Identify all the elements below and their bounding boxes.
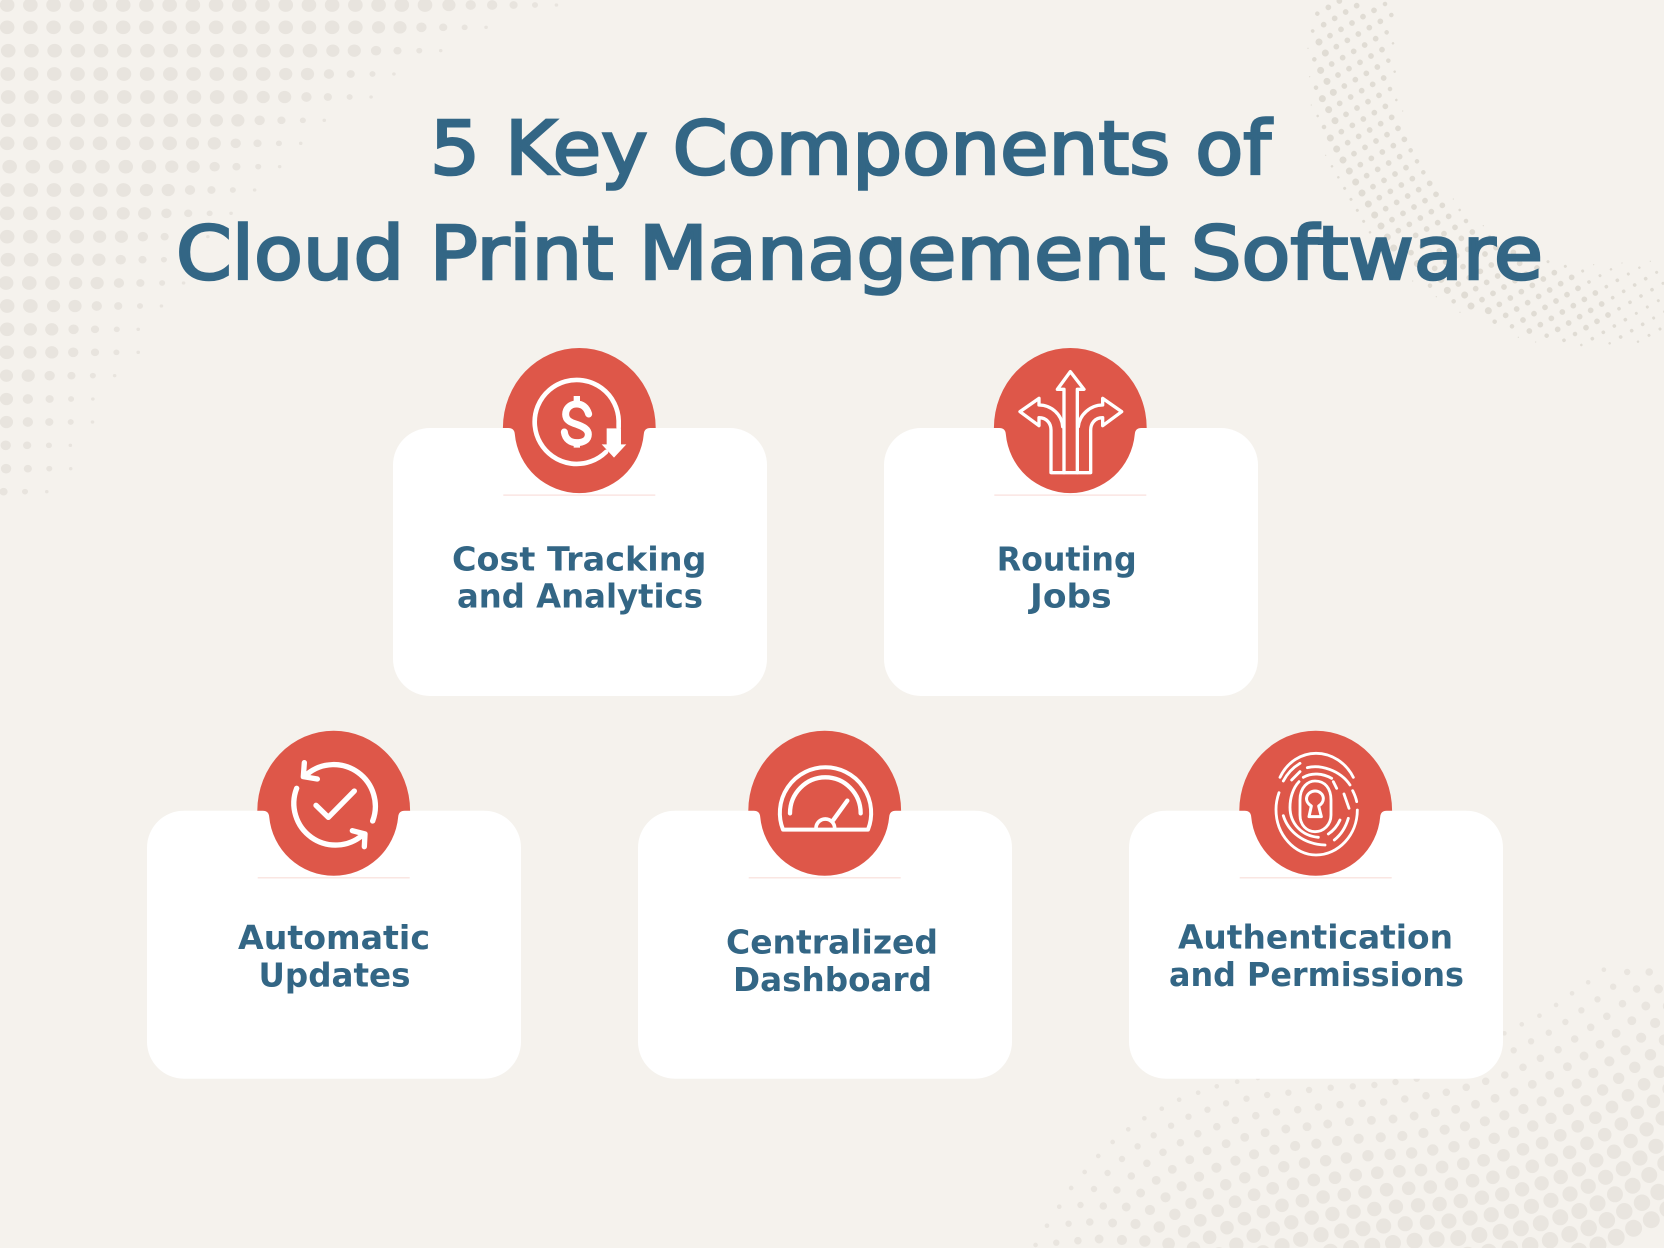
label: Updates xyxy=(258,955,410,994)
icon: three way arrows xyxy=(1020,372,1122,473)
label xyxy=(1169,918,1464,994)
badge: routing xyxy=(994,348,1147,496)
title: Cloud Print Management Software xyxy=(176,211,1543,297)
label: Routing xyxy=(997,540,1137,579)
icon: refresh with check xyxy=(294,763,375,847)
panel: Automatic Updates xyxy=(147,731,521,1079)
panel: Routing Jobs xyxy=(884,348,1258,696)
label: Authentication xyxy=(1178,918,1453,956)
halftone: top right band xyxy=(1262,0,1664,441)
halftone: bottom right xyxy=(1000,960,1664,1248)
label xyxy=(997,540,1137,615)
panel: Cost Tracking and Analytics xyxy=(393,348,767,696)
label: Dashboard xyxy=(733,960,932,999)
panel: Authentication and Permissions xyxy=(1129,731,1503,1079)
label xyxy=(452,540,706,615)
label xyxy=(238,918,430,994)
title xyxy=(176,106,1543,297)
badge: cost tracking xyxy=(503,348,656,496)
label: Cost Tracking xyxy=(452,540,706,579)
title: 5 Key Components of xyxy=(430,106,1273,192)
label: Centralized xyxy=(726,922,938,962)
panel: Centralized Dashboard xyxy=(638,731,1012,1079)
icon: gauge xyxy=(780,767,871,830)
halftone: top left xyxy=(4,5,556,492)
badge: dashboard xyxy=(748,731,901,878)
label: Jobs xyxy=(1028,576,1112,615)
label: Automatic xyxy=(238,918,430,957)
badge: authentication xyxy=(1239,731,1392,878)
badge: updates xyxy=(257,731,410,878)
label: and Analytics xyxy=(457,576,703,615)
label xyxy=(726,922,938,999)
icon: dollar with down arrow xyxy=(535,380,626,464)
icon: fingerprint with keyhole xyxy=(1276,753,1357,855)
label: and Permissions xyxy=(1169,955,1464,994)
